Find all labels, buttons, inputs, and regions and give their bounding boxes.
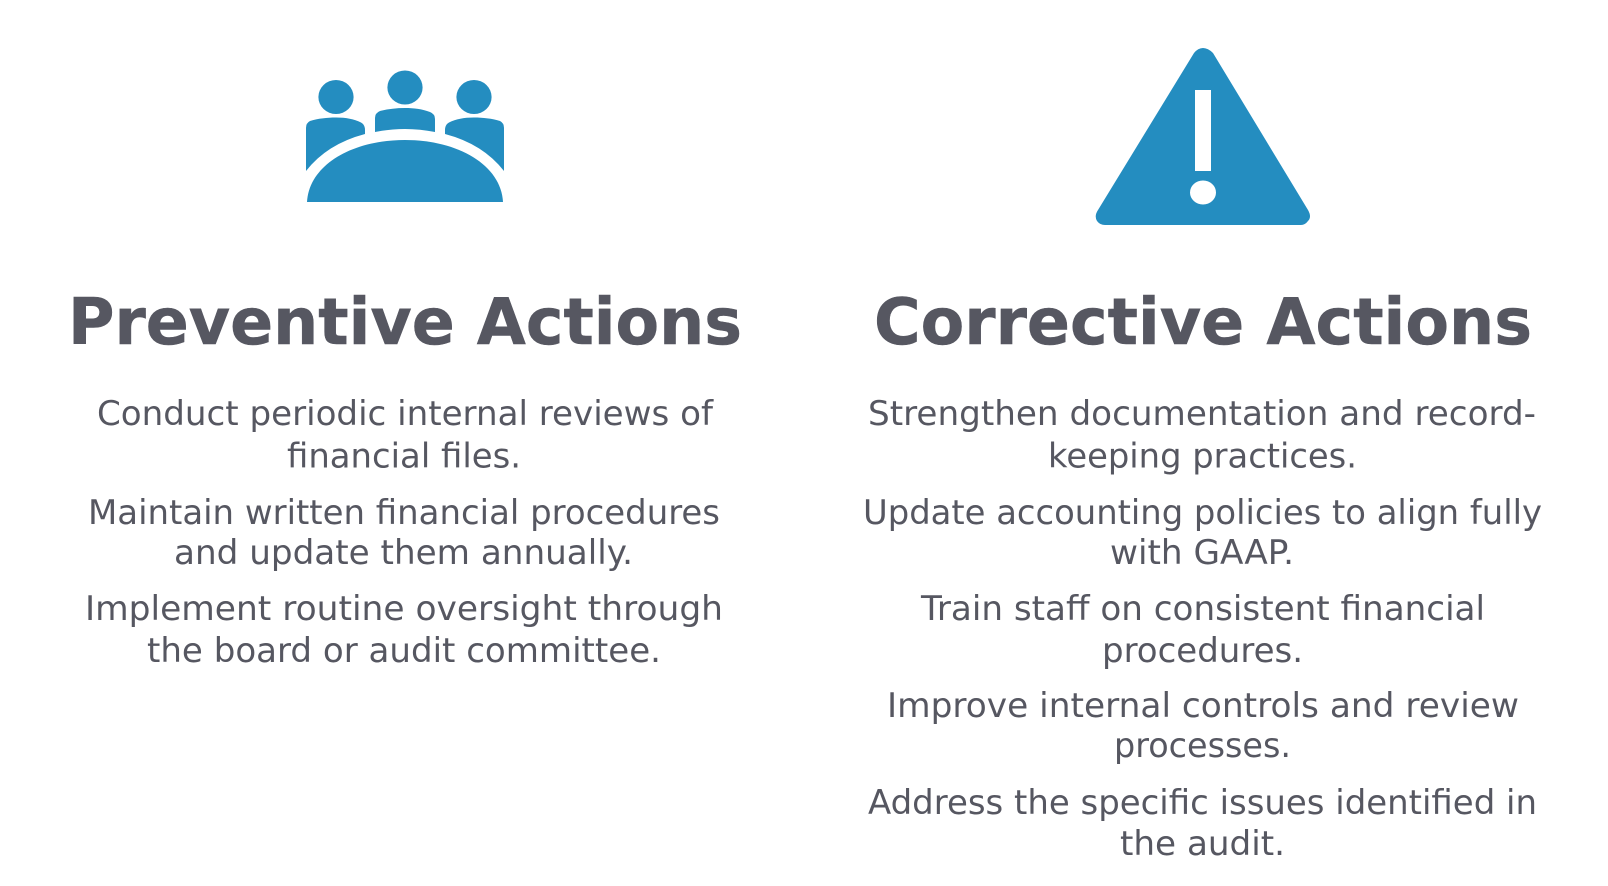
text block: preventive action items: and update them annually. xyxy=(174,533,633,573)
heading: corrective actions: Corrective Actions xyxy=(874,286,1532,360)
text block: corrective action items: with GAAP. xyxy=(1110,533,1294,573)
icon: warning triangle xyxy=(1096,48,1310,225)
text block: corrective action items: Update accounting policies to align fully xyxy=(863,493,1542,533)
text block: preventive action items: Conduct periodic internal reviews of xyxy=(97,394,714,434)
text block: corrective action items: Improve internal controls and review xyxy=(887,686,1519,726)
text block: corrective action items: Address the specific issues identified in xyxy=(868,783,1537,823)
text block: corrective action items: keeping practices. xyxy=(1048,436,1357,476)
text block: preventive action items xyxy=(85,394,723,671)
text block: corrective action items: Strengthen documentation and record- xyxy=(868,394,1536,434)
text block: preventive action items: financial files. xyxy=(287,436,521,476)
icon: people around a table xyxy=(306,70,504,202)
text block: preventive action items: Maintain written financial procedures xyxy=(88,493,720,533)
text block: corrective action items xyxy=(863,394,1542,864)
text block: preventive action items: the board or audit committee. xyxy=(147,631,661,671)
text block: corrective action items: the audit. xyxy=(1120,824,1285,864)
panel: preventive actions xyxy=(68,70,742,671)
text block: preventive action items: Implement routine oversight through xyxy=(85,589,723,629)
text block: corrective action items: procedures. xyxy=(1102,631,1303,671)
text block: corrective action items: processes. xyxy=(1114,726,1291,766)
heading: preventive actions: Preventive Actions xyxy=(68,286,742,360)
text block: corrective action items: Train staff on consistent financial xyxy=(920,589,1485,629)
panel: corrective actions xyxy=(863,48,1542,864)
